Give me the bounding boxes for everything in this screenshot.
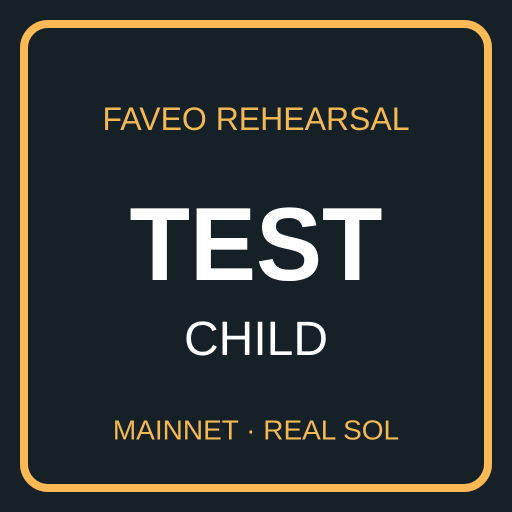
title: TEST: TEST — [130, 186, 382, 303]
heading: FAVEO REHEARSAL: FAVEO REHEARSAL — [102, 101, 410, 137]
footer: MAINNET REAL SOL: MAINNET · REAL SOL — [113, 414, 399, 446]
subtitle: CHILD: CHILD — [184, 313, 328, 366]
